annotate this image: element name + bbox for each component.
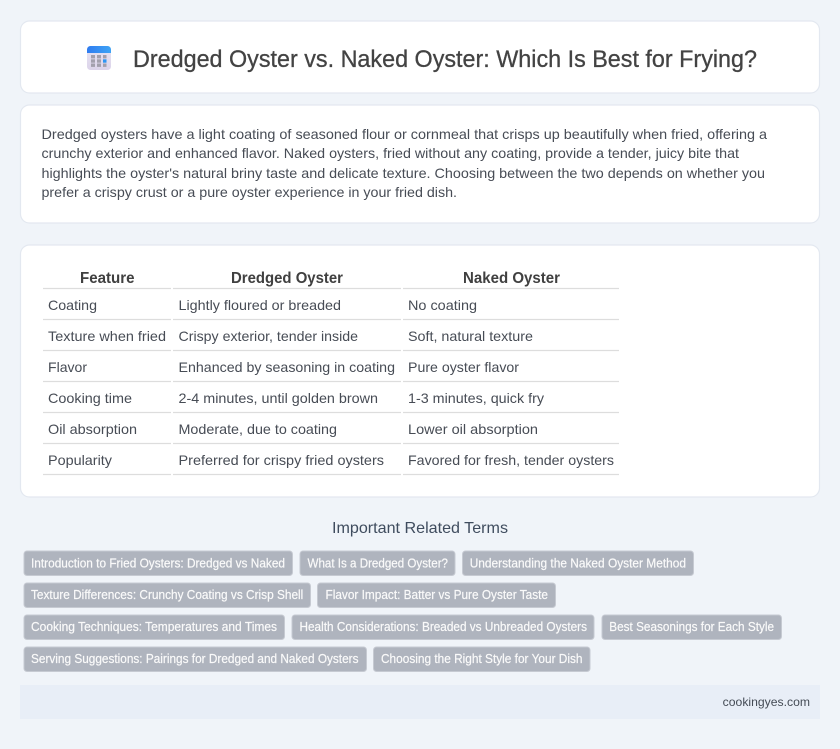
- row: flavor: [48, 359, 519, 375]
- row: oil absorption: [48, 421, 538, 437]
- row: oil absorption: Oil absorption: [48, 421, 137, 437]
- tag: Health Considerations: Breaded vs Unbreaded Oysters: [300, 620, 587, 634]
- tag: [24, 647, 366, 672]
- tag: [24, 615, 284, 640]
- row: cooking time: Cooking time: [48, 390, 132, 406]
- tag: [24, 583, 310, 608]
- row: flavor: Pure oyster flavor: [408, 359, 519, 375]
- panel: intro text: [20, 105, 820, 223]
- row: texture: Soft, natural texture: [408, 328, 533, 344]
- row: coating: Lightly floured or breaded: [178, 297, 341, 313]
- tag: Understanding the Naked Oyster Method: [470, 556, 686, 570]
- table header: Feature: [80, 270, 135, 287]
- footer: cookingyes.com: [723, 695, 810, 709]
- panel: intro text: crunchy exterior and enhanced flavor. Naked oysters, fried without any coating, provide a tender, juicy bite that: [42, 145, 739, 161]
- row: coating: No coating: [408, 297, 477, 313]
- row: cooking time: 2-4 minutes, until golden brown: [178, 390, 378, 406]
- row: texture: [48, 328, 533, 344]
- tag: [300, 551, 455, 576]
- tag: Texture Differences: Crunchy Coating vs Crisp Shell: [31, 588, 303, 602]
- tag: Introduction to Fried Oysters: Dredged vs Naked: [31, 556, 285, 570]
- heading: important related terms: Important Related Terms: [332, 520, 508, 537]
- row: popularity: Popularity: [48, 452, 112, 468]
- row: popularity: Favored for fresh, tender oysters: [408, 452, 614, 468]
- tag: Serving Suggestions: Pairings for Dredged and Naked Oysters: [31, 652, 358, 666]
- row: popularity: [48, 452, 614, 468]
- tag: [292, 615, 594, 640]
- panel: intro text: highlights the oyster's natural briny taste and delicate texture. Choosing between the two depends on whether you: [42, 165, 765, 181]
- tag: [462, 551, 694, 576]
- table header: Naked Oyster: [463, 270, 560, 287]
- row: flavor: Enhanced by seasoning in coating: [178, 359, 395, 375]
- tag: [374, 647, 590, 672]
- tag: Best Seasonings for Each Style: [609, 620, 774, 634]
- row: cooking time: [48, 390, 544, 406]
- tag: Flavor Impact: Batter vs Pure Oyster Taste: [326, 588, 548, 602]
- related term tags: [24, 551, 782, 672]
- panel: intro text: prefer a crispy crust or a pure oyster experience in your fried dish.: [42, 184, 457, 200]
- row: oil absorption: Lower oil absorption: [408, 421, 538, 437]
- panel: comparison table: [20, 245, 820, 497]
- header panel: [20, 21, 820, 93]
- row: texture: Texture when fried: [48, 328, 166, 344]
- tag: [602, 615, 782, 640]
- tag: [318, 583, 556, 608]
- tag: Cooking Techniques: Temperatures and Times: [31, 620, 277, 634]
- row: texture: Crispy exterior, tender inside: [178, 328, 358, 344]
- footer: [20, 685, 820, 719]
- row: coating: [48, 297, 477, 313]
- tag: What Is a Dredged Oyster?: [308, 556, 448, 570]
- tag: [24, 551, 292, 576]
- icon: calendar: [87, 46, 111, 70]
- title: Dredged Oyster vs. Naked Oyster: Which Is Best for Frying?: [133, 46, 757, 73]
- table header: Dredged Oyster: [231, 270, 343, 287]
- tag: Choosing the Right Style for Your Dish: [381, 652, 583, 666]
- row: flavor: Flavor: [48, 359, 87, 375]
- row: coating: Coating: [48, 297, 97, 313]
- row: popularity: Preferred for crispy fried oysters: [178, 452, 384, 468]
- table header: [80, 270, 560, 287]
- panel: intro text: Dredged oysters have a light coating of seasoned flour or cornmeal that crisps up beautifully when fried, offering a: [42, 126, 767, 142]
- row: cooking time: 1-3 minutes, quick fry: [408, 390, 544, 406]
- row: oil absorption: Moderate, due to coating: [178, 421, 337, 437]
